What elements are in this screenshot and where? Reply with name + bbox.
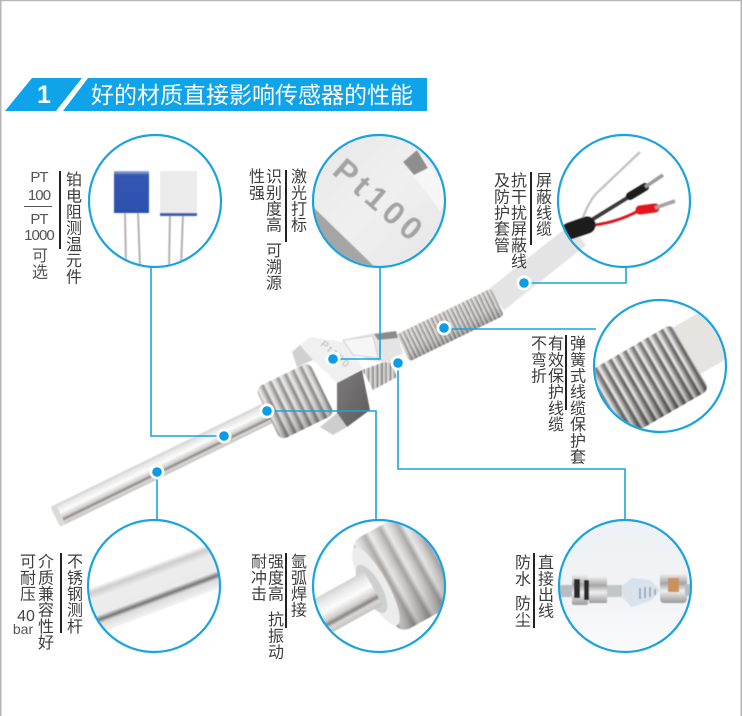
label: element name: 铂电阻测温元件 bbox=[63, 171, 80, 284]
label: weld name: 氩弧焊接 bbox=[288, 553, 305, 618]
label: PT100 / PT1000 option: 可选 bbox=[29, 247, 46, 279]
heading: 好的材质直接影响传感器的性能 bbox=[91, 82, 413, 108]
circle: shielded cable bbox=[556, 134, 692, 268]
label: laser marking: 激光打标 bbox=[288, 168, 305, 233]
label: outlet name: 直接出线 bbox=[535, 554, 552, 619]
spring cable protector bbox=[396, 288, 504, 361]
label: spring name: 弹簧式线缆保护套 bbox=[567, 335, 584, 465]
callout: spring protector bbox=[528, 335, 586, 465]
label: pressure rating bbox=[13, 553, 36, 637]
label: PT100 / PT1000 option: 1000 bbox=[24, 227, 54, 244]
label: strength: 性强 bbox=[246, 168, 263, 200]
title banner bbox=[5, 78, 727, 648]
circle: laser marked Pt100 bbox=[310, 130, 450, 270]
hex nut bbox=[292, 337, 370, 435]
sensor product bbox=[50, 235, 578, 527]
label: pressure rating: 可耐压 bbox=[17, 553, 34, 602]
callout: argon arc weld bbox=[248, 553, 306, 660]
steel rod bbox=[50, 402, 276, 527]
marker dots bbox=[150, 276, 532, 480]
label: PT100 / PT1000 option: PT bbox=[30, 211, 48, 228]
hex nut: Pt100 bbox=[318, 339, 352, 371]
circle: spring protector bbox=[573, 288, 742, 447]
threaded section bbox=[255, 362, 335, 440]
callout: stainless rod bbox=[13, 553, 82, 650]
callout: laser marking bbox=[246, 168, 306, 290]
label: pressure rating: bar bbox=[13, 621, 33, 637]
label: cable name: 屏蔽线缆 bbox=[533, 172, 550, 237]
label: protective sleeve: 及防护套管 bbox=[491, 172, 508, 253]
leader lines bbox=[151, 267, 626, 520]
label: pressure rating: 40 bbox=[17, 608, 35, 625]
circle: laser marked Pt100: Pt100 bbox=[326, 151, 433, 251]
circle: cable connector bbox=[555, 520, 695, 652]
label: strength and vibration: 强度高 抗振动 bbox=[265, 553, 282, 659]
circle: argon arc weld bbox=[312, 518, 446, 654]
crimp and ferrule bbox=[343, 331, 403, 390]
label: interference: 抗干扰屏蔽线 bbox=[508, 172, 525, 269]
callout: shielded cable bbox=[491, 172, 552, 269]
label: identification: 识别度高 可溯源 bbox=[263, 168, 280, 290]
callout: direct outlet bbox=[512, 553, 554, 628]
label: PT100 / PT1000 option: PT bbox=[30, 169, 48, 186]
circle: stainless steel rod bbox=[86, 518, 222, 654]
label: PT100 / PT1000 option: 100 bbox=[28, 187, 50, 204]
label: PT100 / PT1000 option bbox=[24, 169, 54, 279]
callout: platinum resistor bbox=[24, 169, 82, 284]
label: water and dust proof: 防水 防尘 bbox=[512, 554, 529, 628]
label: protection: 有效保护线缆 bbox=[545, 335, 562, 432]
label: no bending: 不弯折 bbox=[528, 335, 545, 384]
label: rod name: 不锈钢测杆 bbox=[64, 553, 81, 634]
label: impact: 耐冲击 bbox=[248, 553, 265, 602]
section number: 1 bbox=[37, 81, 51, 109]
white cable bbox=[496, 235, 578, 300]
label: media compatibility: 介质兼容性好 bbox=[35, 553, 52, 650]
circle: platinum resistor elements bbox=[89, 135, 221, 267]
